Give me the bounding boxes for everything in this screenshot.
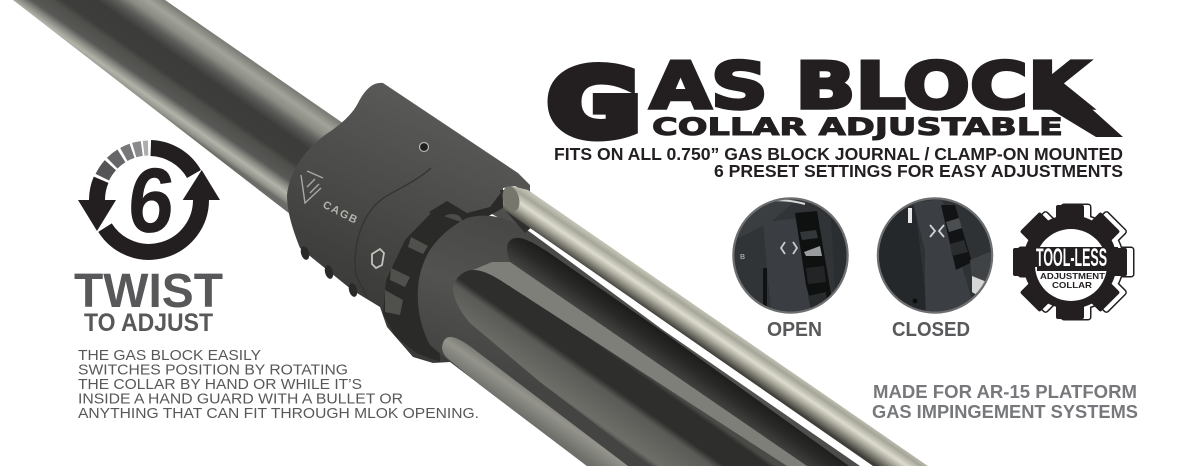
B engraving: B [740,254,745,261]
tooth recesses [385,237,428,315]
fluted barrel [418,216,860,466]
badge: tool-less gear: COLLAR [1052,280,1092,290]
flute: lower [442,337,628,466]
product photo: gas block on barrel [13,0,928,466]
heading: to adjust: TO ADJUST [84,309,213,337]
icon: twist 6 [78,148,220,252]
description text: ANYTHING THAT CAN FIT THROUGH MLOK OPENING. [78,406,479,422]
badge: tool-less gear: TOOL-LESS [1036,244,1107,272]
rear barrel [13,0,350,260]
lip under rod [500,190,533,233]
logo mark [301,171,323,203]
subtitle: 6 PRESET SETTINGS FOR EASY ADJUSTMENTS [714,161,1123,181]
COLLAR ADJUSTABLE: COLLAR ADJUSTABLE [652,113,1063,141]
flute: upper [507,238,849,466]
chevron mark [930,225,944,237]
chevron mark [781,242,797,254]
heading: twist: TWIST [74,265,223,318]
dimples [299,245,359,298]
flute: centre [453,270,787,466]
big G: G [548,50,640,157]
photo: open position [730,195,850,316]
subtitle [554,144,1123,181]
platform note [872,381,1138,422]
platform note: MADE FOR AR-15 PLATFORM [873,381,1137,402]
label: closed: CLOSED [892,319,970,341]
CAGB engraving: CAGB [321,199,360,227]
label: open: OPEN [767,319,822,341]
AS BLOCK: AS BLOCK [650,50,1092,124]
notch in collar [429,190,503,232]
collar teeth ring [383,212,470,362]
description text: THE GAS BLOCK EASILY [78,348,261,364]
description text: SWITCHES POSITION BY ROTATING [78,362,348,378]
description text: THE COLLAR BY HAND OR WHILE IT’S [78,377,362,393]
description text [78,348,479,422]
badge: tool-less gear: ADJUSTMENT [1040,271,1106,281]
subtitle: FITS ON ALL 0.750” GAS BLOCK JOURNAL / CLAMP-ON MOUNTED [554,144,1123,164]
collar seam [355,168,431,297]
badge: tool-less gear [1013,205,1133,319]
gas block body [287,83,530,363]
description text: INSIDE A HAND GUARD WITH A BULLET OR [78,392,403,408]
screw [420,142,428,152]
open hexagon mark [372,249,384,268]
title [548,50,1123,157]
K leg [1035,85,1123,137]
platform note: GAS IMPINGEMENT SYSTEMS [872,401,1138,422]
gas tube rod [500,184,928,466]
photo: closed position [875,195,995,316]
rib [473,262,807,466]
icon: twist 6: 6 [124,149,179,252]
